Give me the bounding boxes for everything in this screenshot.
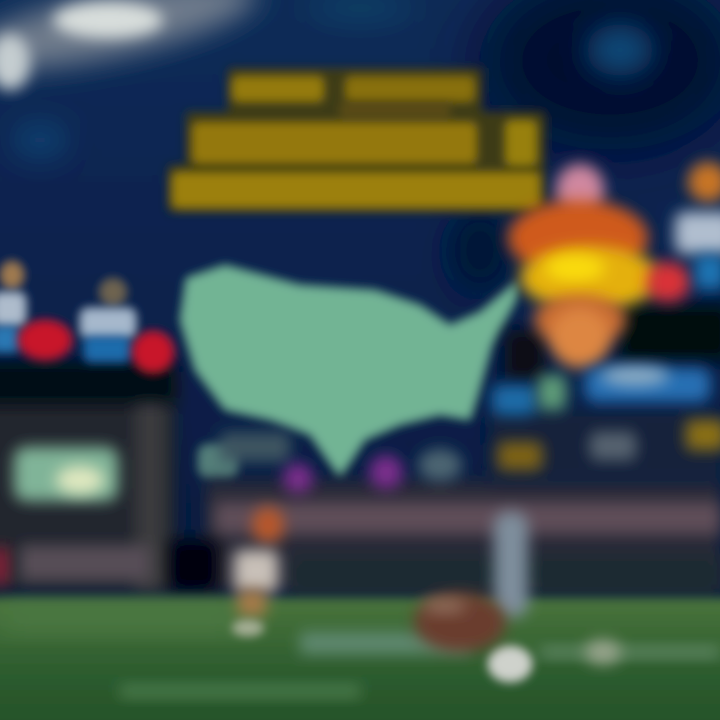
right mascot figure [492,164,720,415]
title: illegible yellow heading [168,68,545,212]
stadium lights: top left glow [0,0,263,90]
map: United States [180,265,518,478]
screen [14,447,118,501]
player: kicker leg [488,512,621,682]
icon: football [414,592,506,652]
field: grass [0,598,720,720]
left stand: scoreboard tower [0,362,176,590]
bleachers [170,412,720,593]
left fans and bunting [0,261,174,373]
scoreboard labels [498,420,720,470]
player: left figure in white and orange [232,507,284,636]
right fan [675,162,720,289]
